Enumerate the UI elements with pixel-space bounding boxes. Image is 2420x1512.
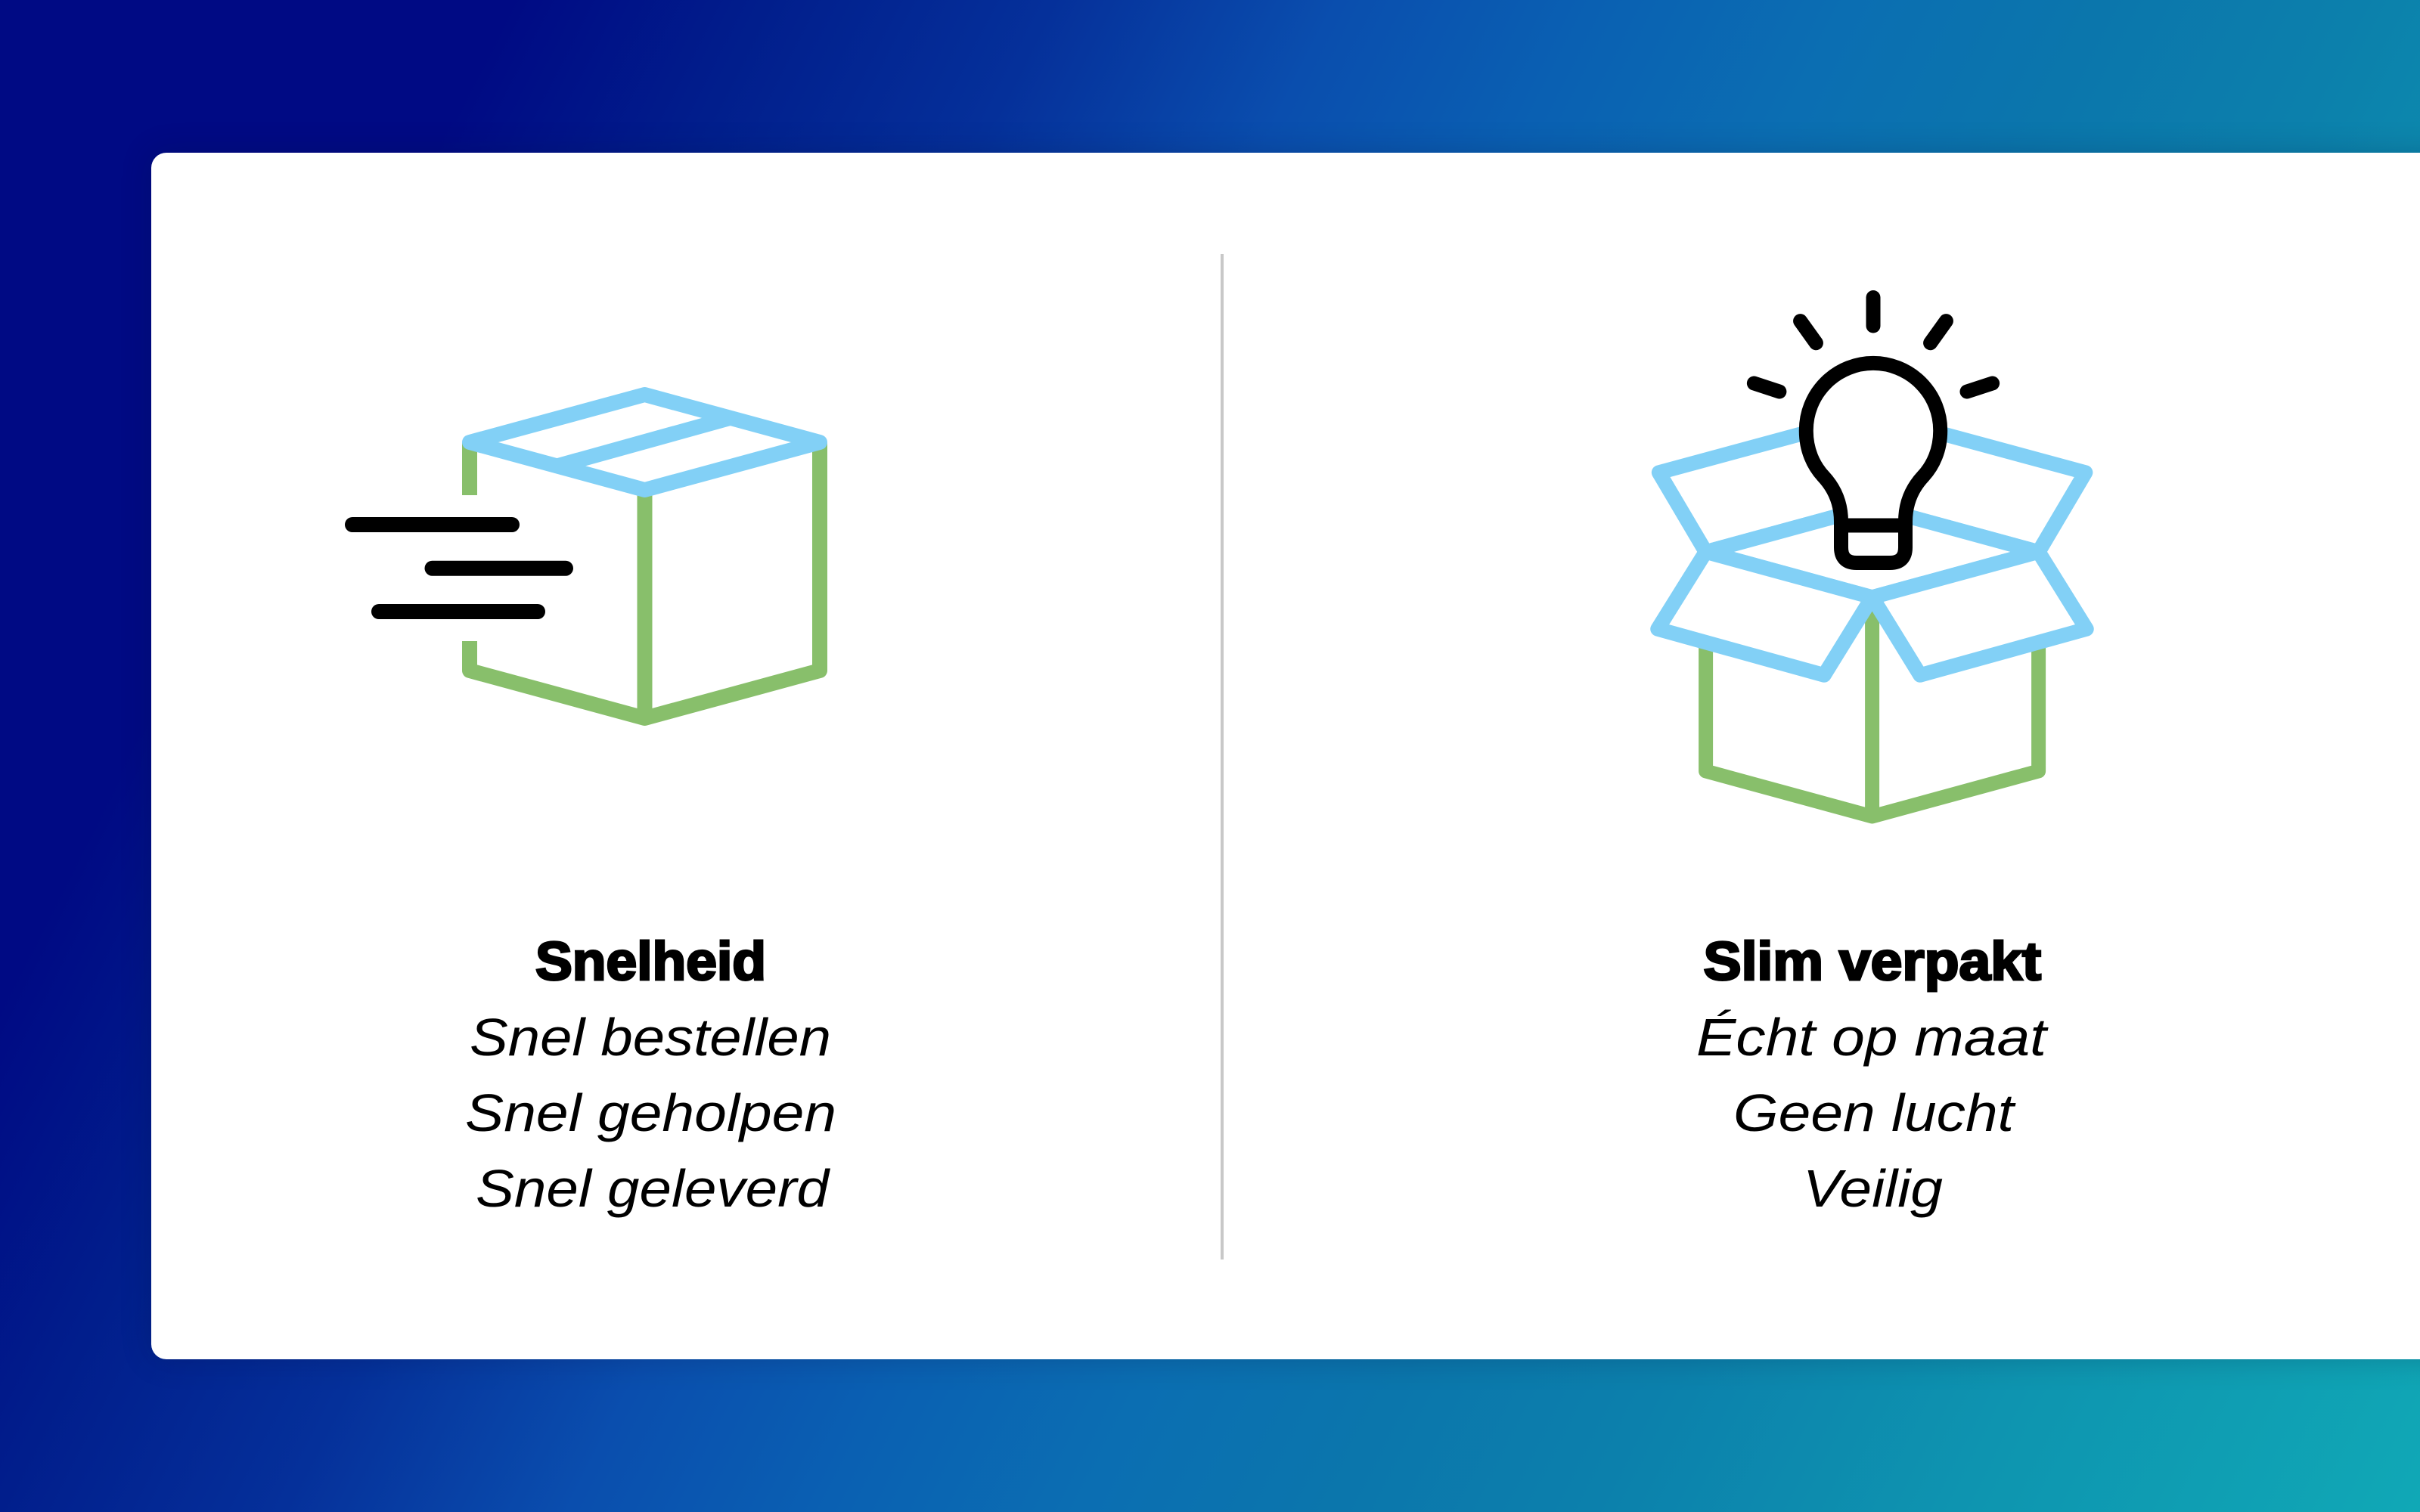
line: snel bestellen: Snel bestellen (470, 1008, 831, 1067)
speed lines (352, 525, 566, 612)
heading: slim verpakt: Slim verpakt (1703, 932, 2041, 992)
icon: light bulb (1754, 298, 1993, 562)
line: geen lucht: Geen lucht (1733, 1083, 2016, 1142)
heading: snelheid: Snelheid (535, 932, 766, 992)
white card panel (151, 153, 2420, 1359)
box lid (470, 395, 820, 490)
panel: snelheid (352, 395, 836, 1218)
icon: moving box (352, 395, 820, 718)
divider (1221, 254, 1224, 1259)
line: echt op maat: Écht op maat (1696, 1008, 2049, 1067)
line: snel geleverd: Snel geleverd (476, 1159, 830, 1218)
open box sides (1706, 597, 2039, 816)
line: snel geholpen: Snel geholpen (465, 1083, 836, 1142)
text: snelheid (465, 932, 836, 1218)
icon: open box with light bulb (1658, 298, 2086, 816)
panel: slim verpakt (1658, 298, 2086, 1218)
line: veilig: Veilig (1803, 1159, 1943, 1218)
box flaps (1658, 427, 2086, 675)
text: slim verpakt (1696, 932, 2049, 1218)
box sides (470, 442, 820, 718)
